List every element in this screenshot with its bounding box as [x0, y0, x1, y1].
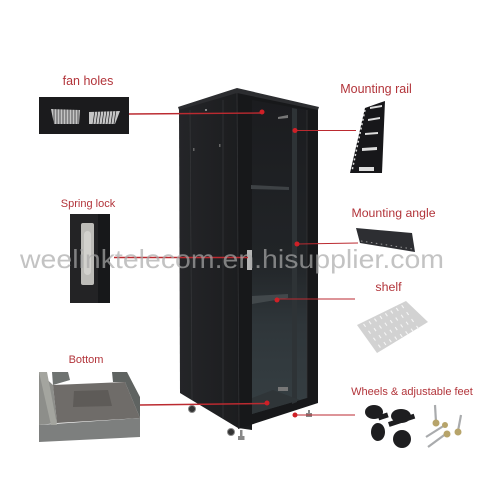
lock handle: [81, 223, 94, 285]
heading: Wheels & adjustable feet: [351, 386, 473, 398]
cabinet front frame: [237, 89, 318, 429]
heading: Bottom: [69, 354, 103, 366]
wheels: [365, 405, 415, 448]
heading: Mounting angle: [351, 206, 436, 220]
upper shelf: [251, 185, 289, 190]
interior floor: [252, 390, 300, 414]
vent plate: [39, 97, 129, 134]
vent right: [89, 111, 120, 124]
floor plate: [278, 387, 288, 391]
foot: [238, 430, 244, 440]
arrow: mounting rail: [292, 128, 356, 133]
cabinet side panel: [179, 90, 252, 430]
top plate: [278, 115, 288, 119]
watermark: weelinktelecom.en.hisupplier.com: [19, 244, 444, 274]
panel: spring lock: [61, 198, 116, 303]
arrow: fan holes: [129, 110, 264, 114]
vent left: [51, 109, 80, 124]
glass door: [252, 100, 307, 414]
heading: Spring lock: [61, 198, 116, 210]
angle bracket: [356, 228, 415, 252]
bottom photo: [39, 372, 57, 425]
panel: wheels and adjustable feet: [351, 386, 473, 448]
panel seams: [190, 93, 307, 428]
heading: Mounting rail: [340, 82, 412, 96]
panel: fan holes: [39, 74, 129, 134]
arrow: mounting angle: [294, 242, 358, 246]
lock photo: [70, 214, 110, 303]
arrow: wheels: [292, 412, 355, 418]
heading: fan holes: [63, 74, 113, 88]
wheel: [188, 406, 196, 412]
cabinet: [178, 88, 319, 440]
wheel: [228, 428, 234, 436]
shelf plate: [357, 301, 428, 353]
adjustable feet: [426, 405, 462, 447]
rail: [350, 101, 385, 173]
heading: shelf: [375, 280, 402, 294]
rack rail: [292, 108, 297, 404]
panel: mounting angle: [351, 206, 436, 252]
arrow: bottom: [140, 400, 270, 406]
lower shelf: [252, 294, 288, 304]
cabinet top: [178, 88, 319, 110]
panel: shelf: [357, 280, 428, 353]
panel: mounting rail: [340, 82, 412, 173]
arrow: spring lock: [114, 256, 248, 258]
panel: bottom: [39, 354, 140, 442]
foot: [306, 410, 312, 417]
side hooks: [193, 109, 220, 151]
arrow: shelf: [274, 298, 355, 302]
door handle: [247, 250, 252, 270]
